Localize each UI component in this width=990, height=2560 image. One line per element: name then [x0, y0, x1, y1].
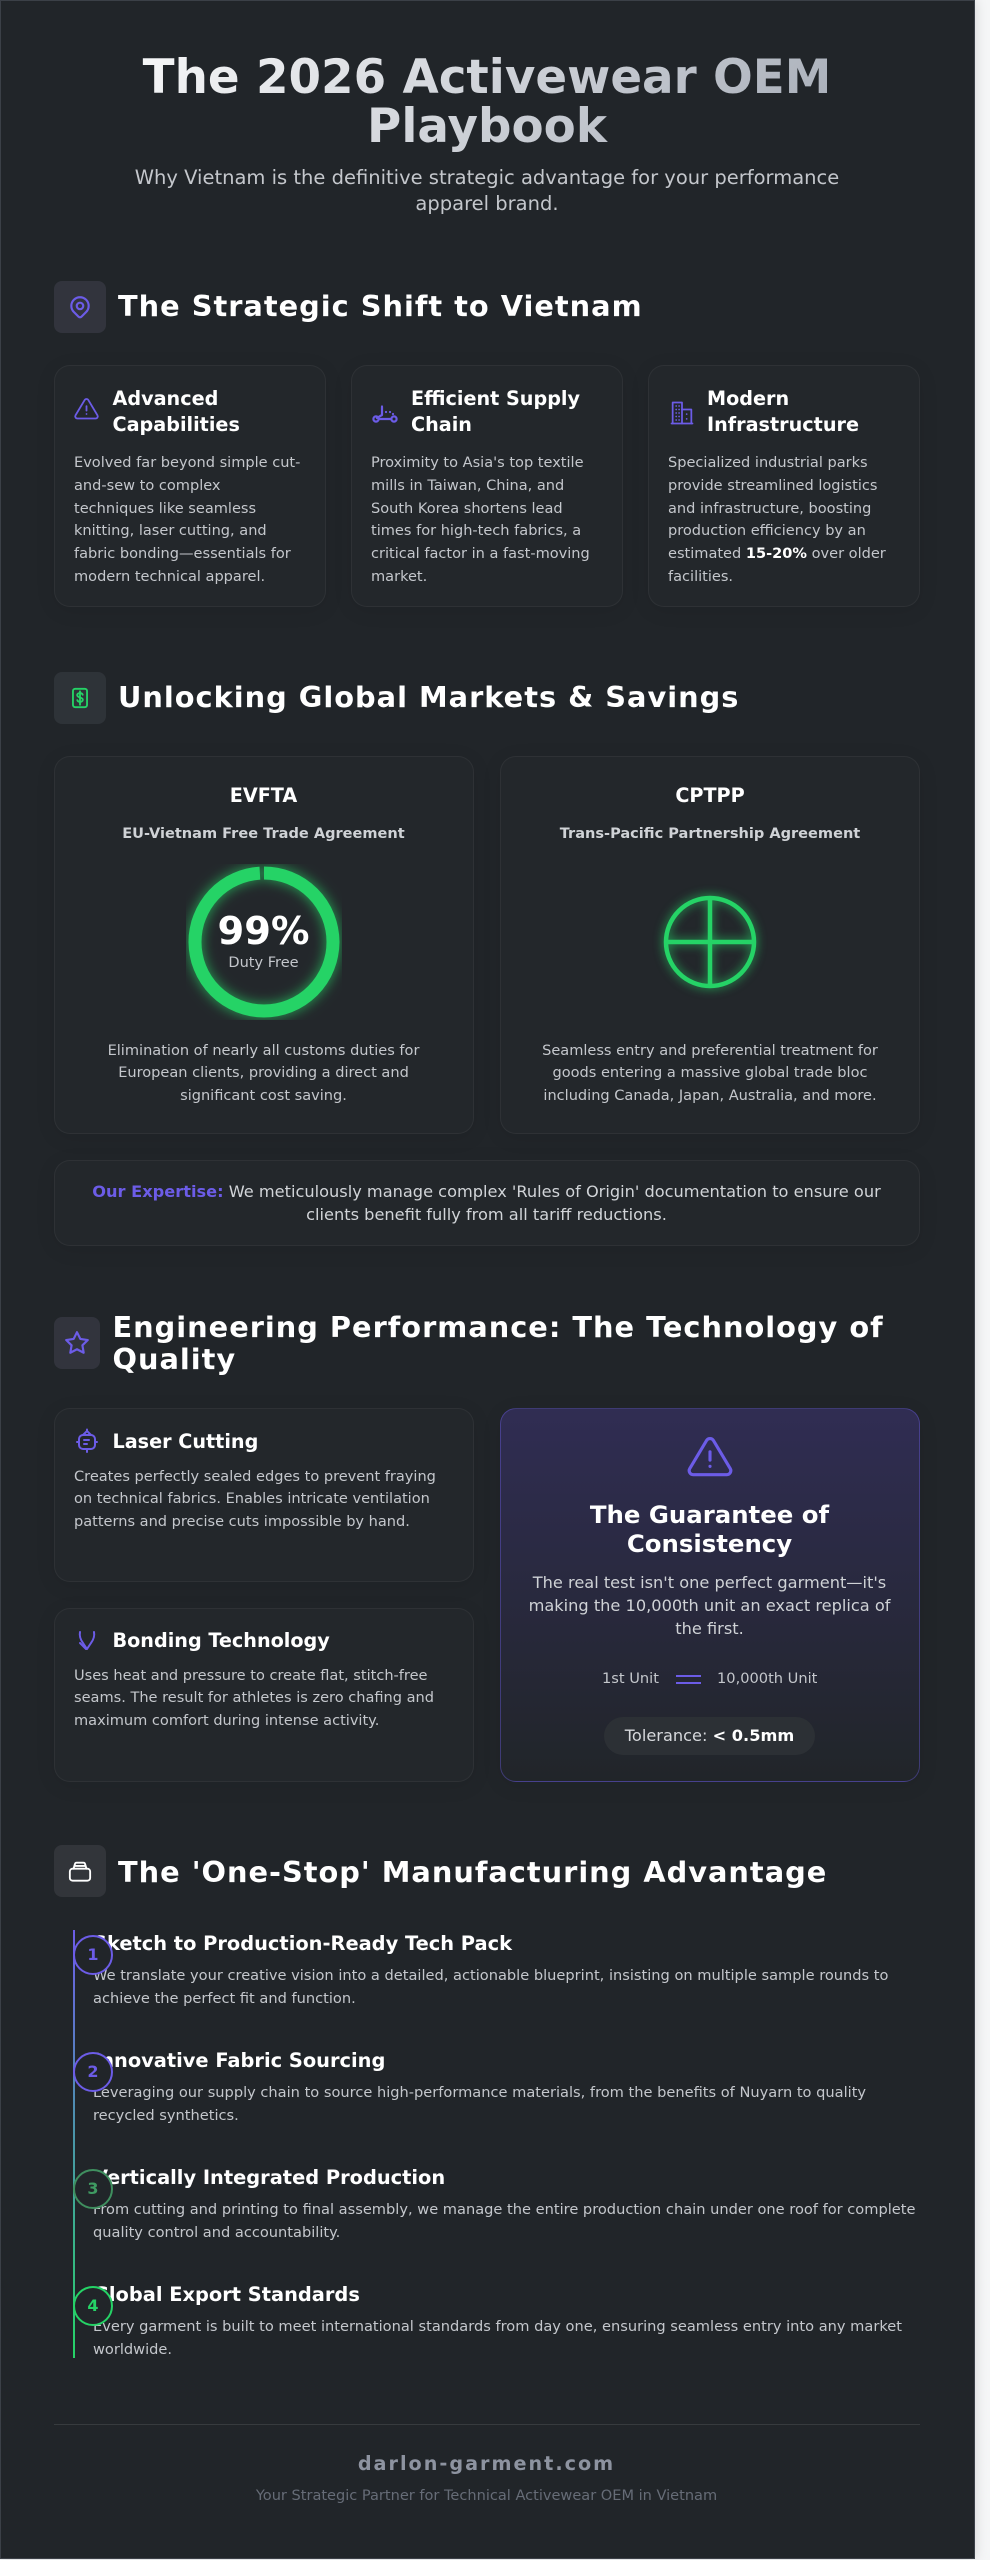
card text: mills in Taiwan, China, and	[371, 477, 564, 494]
first unit label: 1st Unit	[602, 1670, 659, 1687]
step text: recycled synthetics.	[93, 2106, 239, 2124]
step text: Every garment is built to meet international standards from day one, ensuring seamless entry into any market	[93, 2318, 902, 2335]
card text: production efficiency by an	[668, 522, 866, 539]
card: CPTPP	[500, 756, 920, 1134]
timeline	[73, 1930, 915, 2358]
card text: modern technical apparel.	[74, 568, 265, 585]
subtitle: apparel brand.	[415, 192, 559, 214]
panel title: Consistency	[627, 1529, 792, 1558]
step text	[93, 2084, 866, 2124]
card text: fabric bonding—essentials for	[74, 545, 291, 562]
card text: critical factor in a fast-moving	[371, 545, 590, 562]
step text: Leveraging our supply chain to source high-performance materials, from the benefits of Nuyarn to quality	[93, 2084, 866, 2101]
card: bonding technology	[54, 1608, 474, 1782]
footer tagline: Your Strategic Partner for Technical Activewear OEM in Vietnam	[256, 2487, 717, 2504]
section: the strategic shift	[54, 281, 920, 607]
step text: quality control and accountability.	[93, 2224, 340, 2240]
card text: goods entering a massive global trade bloc	[553, 1064, 867, 1081]
card: EVFTA	[54, 756, 474, 1134]
card text: Evolved far beyond simple cut-	[74, 454, 300, 471]
card text: and infrastructure, boosting	[668, 500, 871, 517]
ten thousandth unit label: 10,000th Unit	[717, 1670, 817, 1687]
card text: European clients, providing a direct and	[118, 1064, 409, 1081]
step text	[93, 2201, 915, 2240]
donut value: 99%	[218, 908, 309, 954]
step number: 1	[87, 1945, 99, 1964]
panel title	[590, 1500, 830, 1558]
icon: globe	[656, 888, 764, 996]
step title: Innovative Fabric Sourcing	[93, 2048, 385, 2072]
card text	[74, 1468, 436, 1530]
step number	[73, 2169, 113, 2209]
card title: Efficient Supply	[411, 387, 580, 410]
icon: star	[54, 1317, 100, 1369]
donut chart: 99 percent duty free	[186, 864, 342, 1020]
icon: warning triangle	[688, 1437, 732, 1476]
card text: market.	[371, 568, 427, 585]
card title	[112, 387, 240, 436]
icon: building	[670, 402, 694, 424]
card text: Elimination of nearly all customs duties for	[108, 1042, 419, 1058]
card text: facilities.	[668, 568, 733, 585]
subtitle: Why Vietnam is the definitive strategic advantage for your performance	[135, 166, 839, 188]
step text: achieve the perfect fit and function.	[93, 1990, 356, 2006]
card text: techniques like seamless	[74, 500, 256, 517]
card text	[371, 454, 590, 585]
title	[54, 54, 920, 152]
heading	[112, 1310, 884, 1376]
icon: map pin	[54, 281, 106, 333]
footer domain: darlon-garment.com	[358, 2452, 615, 2475]
subtitle	[135, 166, 839, 214]
heading: The 'One-Stop' Manufacturing Advantage	[118, 1855, 827, 1889]
comparison: first unit equals ten thousandth unit	[602, 1670, 817, 1687]
card: efficient supply chain	[351, 365, 623, 607]
panel: guarantee of consistency	[500, 1408, 920, 1782]
step number: 3	[87, 2179, 99, 2198]
step title: Sketch to Production-Ready Tech Pack	[93, 1932, 512, 1954]
card title: Advanced	[112, 387, 218, 410]
card title: CPTPP	[675, 784, 745, 807]
step title: Global Export Standards	[93, 2282, 360, 2306]
card text	[108, 1042, 420, 1104]
card text	[74, 454, 300, 585]
title: Playbook	[367, 100, 607, 154]
card text: and-sew to complex	[74, 477, 221, 494]
step text: We translate your creative vision into a detailed, actionable blueprint, insisting on multiple sample rounds to	[93, 1967, 888, 1984]
card title: Modern	[707, 387, 789, 410]
step text: From cutting and printing to final assembly, we manage the entire production chain under one roof for complete	[93, 2201, 915, 2218]
donut label: Duty Free	[228, 954, 299, 970]
card title	[411, 387, 580, 436]
card text	[542, 1042, 878, 1104]
tolerance pill	[604, 1717, 815, 1755]
agreement name: EU-Vietnam Free Trade Agreement	[122, 825, 405, 842]
panel title: The Guarantee of	[590, 1500, 829, 1528]
card title: Chain	[411, 413, 472, 436]
icon: route	[372, 405, 398, 423]
step number	[73, 2286, 113, 2326]
card text: on technical fabrics. Enables intricate ventilation	[74, 1490, 430, 1507]
card title: EVFTA	[230, 784, 297, 807]
step 1	[74, 1932, 888, 2006]
equals sign	[676, 1675, 701, 1684]
icon: package	[54, 1845, 106, 1897]
card title: Laser Cutting	[112, 1430, 258, 1452]
heading: The Strategic Shift to Vietnam	[118, 289, 643, 323]
card text: Seamless entry and preferential treatment for	[542, 1042, 878, 1058]
card text: times for high-tech fabrics, a	[371, 522, 581, 539]
callout text: Our Expertise: We meticulously manage complex 'Rules of Origin' documentation to ensure our	[92, 1182, 881, 1201]
icon: warning triangle	[74, 398, 99, 420]
icon: money	[54, 672, 106, 724]
card text: including Canada, Japan, Australia, and more.	[543, 1087, 877, 1104]
section: engineering performance	[54, 1310, 920, 1782]
card text: patterns and precise cuts impossible by hand.	[74, 1513, 410, 1530]
section: global markets and savings	[54, 672, 920, 1246]
timeline rail	[73, 1930, 75, 2358]
card text: knitting, laser cutting, and	[74, 522, 267, 539]
title: The 2026 Activewear OEM	[143, 51, 831, 105]
panel text: The real test isn't one perfect garment—it's	[533, 1573, 886, 1592]
card title: Capabilities	[112, 413, 240, 436]
step text	[93, 2318, 902, 2358]
card title: Bonding Technology	[112, 1629, 330, 1652]
card text: Creates perfectly sealed edges to prevent fraying	[74, 1468, 436, 1484]
card title: Infrastructure	[707, 413, 859, 436]
step 2	[73, 2048, 866, 2124]
card text: provide streamlined logistics	[668, 477, 877, 494]
heading: Quality	[112, 1342, 236, 1376]
card text	[668, 454, 886, 585]
card text: estimated 15-20% over older	[668, 545, 886, 562]
card: modern infrastructure	[648, 365, 920, 607]
icon: bonding	[78, 1631, 96, 1650]
panel text	[529, 1573, 891, 1638]
card text: maximum comfort during intense activity.	[74, 1712, 379, 1729]
step text: worldwide.	[93, 2340, 172, 2358]
heading: Unlocking Global Markets & Savings	[118, 680, 739, 714]
panel text: making the 10,000th unit an exact replica of	[529, 1596, 890, 1615]
step number: 2	[87, 2062, 99, 2081]
card title	[707, 387, 859, 436]
card text: seams. The result for athletes is zero chafing and	[74, 1689, 434, 1706]
footer	[54, 2424, 920, 2515]
step number	[73, 1935, 113, 1975]
card text: South Korea shortens lead	[371, 500, 563, 517]
icon: laser robot	[76, 1428, 98, 1453]
step number	[73, 2052, 113, 2092]
callout text	[92, 1182, 881, 1224]
card: laser cutting	[54, 1408, 474, 1582]
step 4	[73, 2282, 902, 2358]
callout: our expertise	[54, 1160, 920, 1246]
panel text: the first.	[675, 1619, 744, 1638]
step number: 4	[87, 2296, 99, 2315]
card text: Uses heat and pressure to create flat, stitch-free	[74, 1666, 427, 1684]
card text: Specialized industrial parks	[668, 454, 868, 471]
card text: significant cost saving.	[180, 1087, 347, 1104]
step text	[93, 1967, 888, 2006]
agreement name: Trans-Pacific Partnership Agreement	[560, 825, 860, 842]
heading: Engineering Performance: The Technology of	[112, 1310, 884, 1344]
step title: Vertically Integrated Production	[93, 2166, 445, 2188]
step 3	[73, 2166, 915, 2240]
card: advanced capabilities	[54, 365, 326, 607]
callout text: clients benefit fully from all tariff reductions.	[306, 1205, 667, 1224]
card text: Proximity to Asia's top textile	[371, 454, 584, 471]
section: one-stop manufacturing	[54, 1845, 915, 2358]
card text	[74, 1666, 434, 1729]
tolerance pill: Tolerance: < 0.5mm	[625, 1726, 794, 1745]
